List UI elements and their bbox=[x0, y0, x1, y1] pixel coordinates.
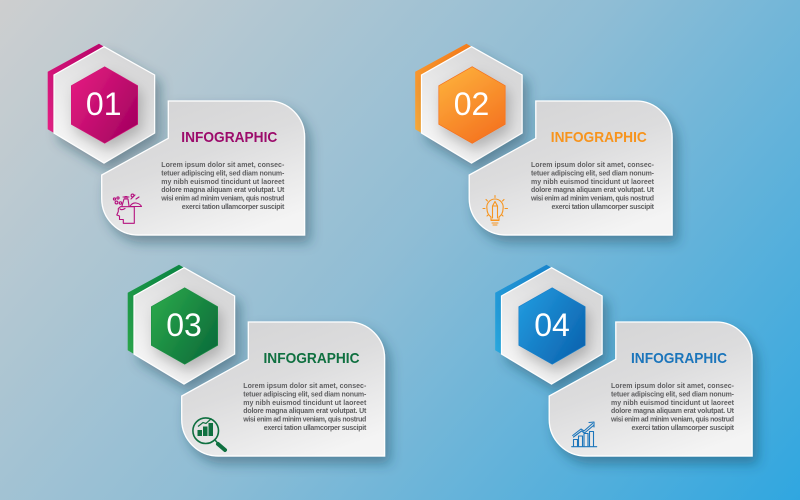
body text 01: exerci tation ullamcorper suscipit bbox=[182, 204, 285, 211]
hexagon badge 04: 04 bbox=[534, 307, 570, 343]
body text 01: dolore magna aliquam erat volutpat. Ut bbox=[161, 187, 285, 194]
heading 03: INFOGRAPHIC bbox=[264, 350, 360, 367]
body text 03: my nibh euismod tincidunt ut laoreet bbox=[243, 400, 367, 407]
hexagon badge 02: 02 bbox=[454, 86, 489, 122]
icon: head with ideas bbox=[113, 194, 142, 223]
body text 01 bbox=[160, 162, 285, 211]
body text 01: wisi enim ad minim veniam, quis nostrud bbox=[160, 196, 284, 203]
body text 02: wisi enim ad minim veniam, quis nostrud bbox=[530, 196, 654, 203]
panel: step 04 bbox=[495, 265, 752, 456]
hexagon badge 03: 03 bbox=[166, 307, 202, 343]
hexagon badge 01 bbox=[48, 44, 155, 163]
heading 01: INFOGRAPHIC bbox=[181, 129, 277, 146]
body text 01: tetuer adipiscing elit, sed diam nonum- bbox=[161, 170, 285, 177]
heading 02: INFOGRAPHIC bbox=[551, 129, 647, 146]
body text 03: wisi enim ad minim veniam, quis nostrud bbox=[242, 417, 366, 424]
text card 02 bbox=[469, 101, 672, 235]
body text 02: dolore magna aliquam erat volutpat. Ut bbox=[531, 187, 655, 194]
icon: light bulb with pencil bbox=[483, 196, 508, 225]
panel: step 03 bbox=[128, 265, 385, 456]
hexagon badge 01: 01 bbox=[86, 86, 121, 122]
body text 02 bbox=[530, 162, 655, 211]
body text 04: dolore magna aliquam erat volutpat. Ut bbox=[611, 408, 735, 415]
text card 01 bbox=[102, 101, 305, 235]
body text 04: exerci tation ullamcorper suscipit bbox=[632, 425, 735, 432]
body text 03: exerci tation ullamcorper suscipit bbox=[264, 425, 367, 432]
body text 04: tetuer adipiscing elit, sed diam nonum- bbox=[611, 391, 735, 398]
hexagon badge 02 bbox=[415, 44, 522, 163]
body text 03: Lorem ipsum dolor sit amet, consec- bbox=[243, 383, 367, 390]
icon: rising bar chart bbox=[572, 422, 597, 447]
panel: step 01 bbox=[48, 44, 305, 235]
body text 04: wisi enim ad minim veniam, quis nostrud bbox=[610, 417, 734, 424]
panel: step 02 bbox=[415, 44, 672, 235]
body text 03 bbox=[242, 383, 367, 432]
body text 03: dolore magna aliquam erat volutpat. Ut bbox=[243, 408, 367, 415]
body text 02: tetuer adipiscing elit, sed diam nonum- bbox=[531, 170, 655, 177]
body text 04 bbox=[610, 383, 735, 432]
text card 04 bbox=[549, 322, 752, 456]
body text 03: tetuer adipiscing elit, sed diam nonum- bbox=[243, 391, 367, 398]
icon: magnifier over chart bbox=[193, 418, 225, 450]
text card 03 bbox=[182, 322, 385, 456]
body text 02: exerci tation ullamcorper suscipit bbox=[552, 204, 655, 211]
body text 01: my nibh euismod tincidunt ut laoreet bbox=[161, 179, 285, 186]
hexagon badge 03 bbox=[128, 265, 235, 384]
heading 04: INFOGRAPHIC bbox=[631, 350, 727, 367]
hexagon badge 04 bbox=[495, 265, 602, 384]
body text 04: my nibh euismod tincidunt ut laoreet bbox=[611, 400, 735, 407]
body text 02: Lorem ipsum dolor sit amet, consec- bbox=[531, 162, 655, 169]
body text 04: Lorem ipsum dolor sit amet, consec- bbox=[611, 383, 735, 390]
body text 01: Lorem ipsum dolor sit amet, consec- bbox=[161, 162, 285, 169]
body text 02: my nibh euismod tincidunt ut laoreet bbox=[531, 179, 655, 186]
